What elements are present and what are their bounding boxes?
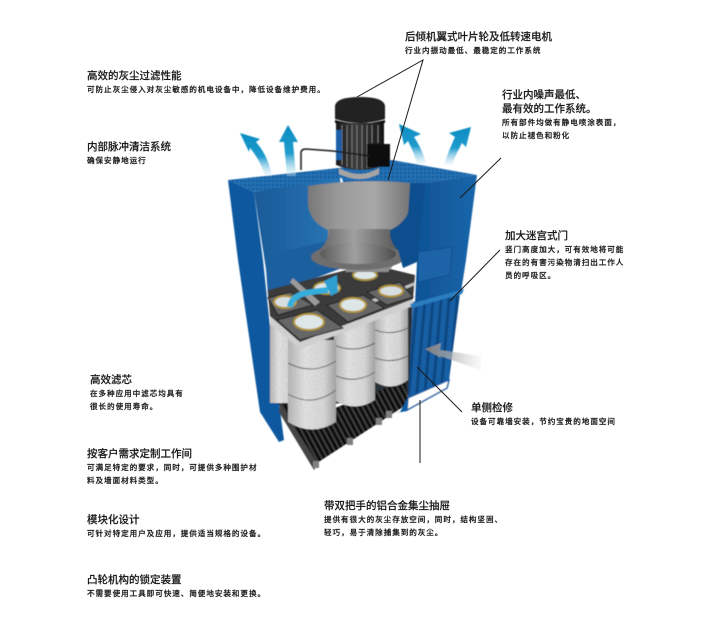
airflow arrow 2 [279,125,298,176]
text: custom workspace: 可满足特定的要求，同时，可提供多种围护材 [87,463,257,472]
text: dust drawer: 提供有很大的灰尘存放空间，同时，结构坚固、 [324,515,503,524]
text: modular design [87,514,266,538]
back filter cartridge [270,320,294,403]
text: fan and motor: 行业内振动最低、最稳定的工作系统 [405,46,541,55]
fan housing [308,181,410,270]
text: filter cartridges: 在多种应用中滤芯均具有 [90,389,184,398]
text: fan and motor: 后倾机翼式叶片轮及低转速电机 [405,31,552,43]
text: dust drawer [324,500,503,537]
filter plates with yellow rings [268,282,413,340]
inner airflow arrow [290,275,338,307]
text: filter cartridges: 很长的使用寿命。 [90,402,158,411]
text: pulse cleaning [87,141,171,165]
power cable [301,149,370,170]
filter cartridges front column [288,340,336,430]
text: enlarged door: 竖门高度加大，可有效地将可能 [505,245,624,254]
grey inlet air arrow [425,343,481,370]
text: modular design: 可针对特定用户及应用，提供适当规格的设备。 [87,529,266,538]
text: enlarged door: 存在的有害污染物清扫出工作人 [505,258,624,267]
access door detail [418,247,452,282]
text: filter cartridges [90,374,184,411]
text: cam lock: 凸轮机构的锁定装置 [87,574,182,586]
text: high efficiency dust filtration: 可防止灰尘侵入对灰尘敏感的机电设备中，降低设备维护费用。 [87,85,326,94]
leader lines [357,60,501,463]
text: lowest noise: 最有效的工作系统。 [502,103,596,115]
text: fan and motor [405,31,552,55]
text: pulse cleaning: 确保安静地运行 [87,156,147,165]
airflow arrow 3 [399,124,426,164]
airflow arrow 1 [240,133,272,176]
text: filter cartridges: 高效滤芯 [90,374,132,386]
right inner edge [393,184,425,268]
text: dust drawer: 轻巧，易于清除捕集到的灰尘。 [324,528,443,537]
cabinet roof grating [228,160,477,192]
text: custom workspace: 按客户需求定制工作间 [87,448,192,460]
text: single side service [471,402,616,426]
filter cartridges middle column [334,320,375,406]
text: lowest noise: 行业内噪声最低、 [502,89,586,101]
text: cam lock [87,574,266,598]
filter cartridges right column [375,300,408,387]
text: enlarged door: 员的呼吸区。 [505,271,556,280]
text: enlarged door: 加大迷宫式门 [505,230,568,242]
grate tray [278,380,409,470]
text: single side service: 设备可靠墙安装，节约宝贵的地面空间 [471,417,616,426]
left front panel [228,180,284,442]
text: modular design: 模块化设计 [87,514,140,526]
text: single side service: 单侧检修 [471,402,513,414]
text: pulse cleaning: 内部脉冲清洁系统 [87,141,171,153]
text: lowest noise: 以防止褪色和粉化 [502,131,570,140]
cabinet back walls [254,175,428,296]
mounting beam [270,299,413,349]
text: cam lock: 不需要使用工具即可快速、简便地安装和更换。 [87,589,266,598]
text: lowest noise [502,89,621,140]
text: high efficiency dust filtration [87,70,326,94]
text: custom workspace: 料及墙面材料类型。 [87,476,164,485]
dark backdrop behind filters [268,285,413,410]
text: enlarged door [505,230,624,280]
tube sheet back row [268,262,415,342]
electric motor [335,97,390,179]
right upper panel [415,175,477,303]
airflow arrow 4 [444,127,471,165]
text: dust drawer: 带双把手的铝合金集尘抽屉 [324,500,450,512]
text: custom workspace [87,448,257,485]
text: lowest noise: 所有部件均做有静电喷涂表面， [502,118,621,127]
text: high efficiency dust filtration: 高效的灰尘过滤性能 [87,70,182,82]
louvred door [396,289,464,413]
